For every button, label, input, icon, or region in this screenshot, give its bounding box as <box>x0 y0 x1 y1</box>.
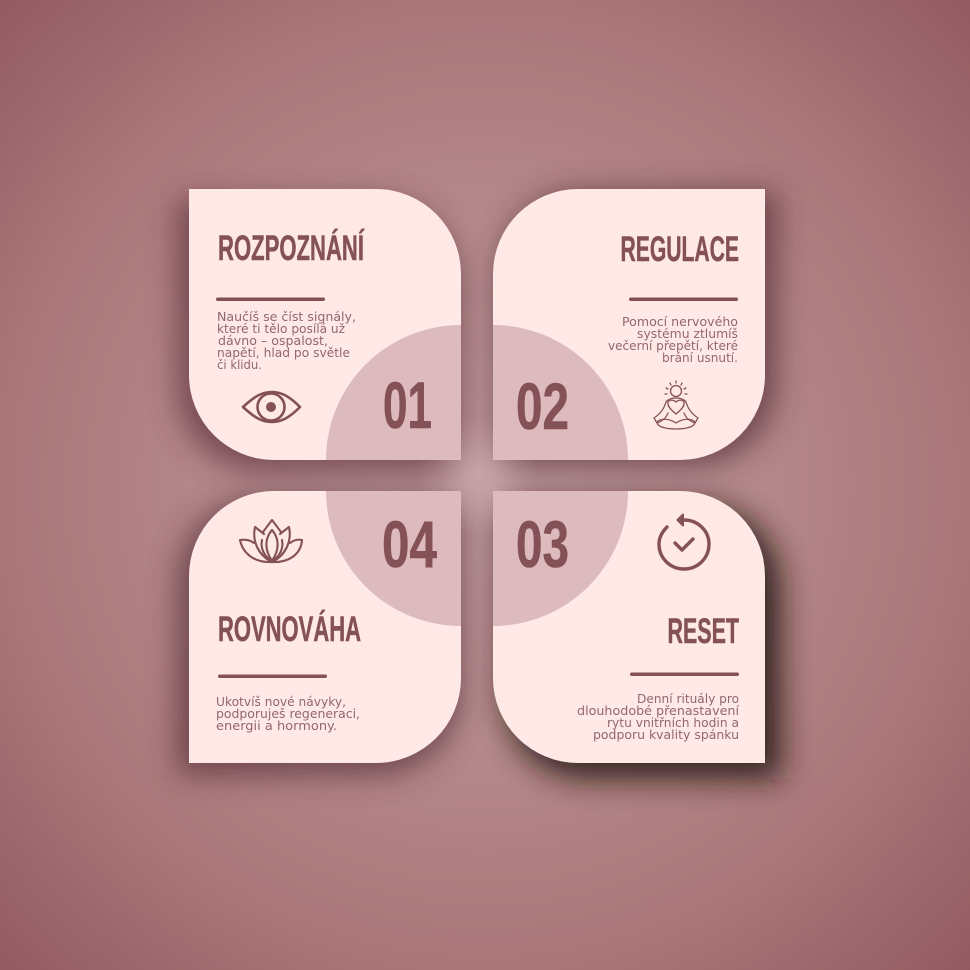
heading: Regulace: REGULACE <box>620 230 739 269</box>
card shape 04 <box>189 491 461 763</box>
divider 03 <box>630 672 739 676</box>
icon: lotus <box>240 520 302 562</box>
body text 02: večerní přepětí, které <box>608 339 738 353</box>
body text 04: podporuješ regeneraci, <box>216 707 360 721</box>
divider 04 <box>218 674 327 678</box>
icon: eye <box>243 392 300 422</box>
body text 03: Denní rituály pro <box>637 692 739 706</box>
body text 01: Naučíš se číst signály, <box>217 310 356 324</box>
panel: 03 Reset <box>493 491 765 763</box>
heading: Reset: RESET <box>668 612 739 651</box>
card shadows <box>177 191 781 779</box>
number 01: 01 <box>383 368 432 442</box>
number 03: 03 <box>516 507 569 581</box>
body text 03: rytu vnitřních hodin a <box>607 716 739 730</box>
body text 03: dlouhodobé přenastavení <box>577 704 740 718</box>
body text 01: dávno – ospalost, <box>218 334 328 348</box>
quarter circle 04 <box>326 491 461 626</box>
body text 04: Ukotvíš nové návyky, <box>216 695 346 709</box>
heading: Rovnováha: ROVNOVÁHA <box>218 609 361 649</box>
panel: 04 Rovnováha <box>189 491 461 763</box>
body text 04 <box>216 695 360 733</box>
body text 02 <box>608 315 738 365</box>
number 02: 02 <box>516 369 569 443</box>
body text 01 <box>217 310 356 372</box>
quarter circle 01 <box>326 325 461 460</box>
quarter circle 02 <box>493 325 628 460</box>
body text 03: podporu kvality spánku <box>593 728 739 742</box>
number 04: 04 <box>382 507 437 581</box>
body text 01: které ti tělo posílá už <box>217 322 345 336</box>
heading: Rozpoznání: ROZPOZNÁNÍ <box>218 228 365 268</box>
body text 02: brání usnutí. <box>662 351 738 365</box>
body text 01: napětí, hlad po světle <box>217 346 350 360</box>
card shape 02 <box>493 189 765 460</box>
panel: 02 Regulace <box>493 189 765 460</box>
body text 02: systému ztlumíš <box>637 327 738 341</box>
body text 04: energii a hormony. <box>216 719 337 733</box>
icon: reset with check <box>659 514 709 569</box>
divider 01 <box>216 298 325 301</box>
card shape 01 <box>189 189 461 460</box>
body text 01: či klidu. <box>217 358 262 372</box>
body text 03 <box>577 692 740 742</box>
icon: meditation <box>654 381 698 429</box>
body text 02: Pomocí nervového <box>622 315 738 329</box>
quarter circle 03 <box>493 491 628 626</box>
divider 02 <box>629 298 738 301</box>
card shape 03 <box>493 491 765 763</box>
panel: 01 Rozpoznání <box>189 189 461 460</box>
